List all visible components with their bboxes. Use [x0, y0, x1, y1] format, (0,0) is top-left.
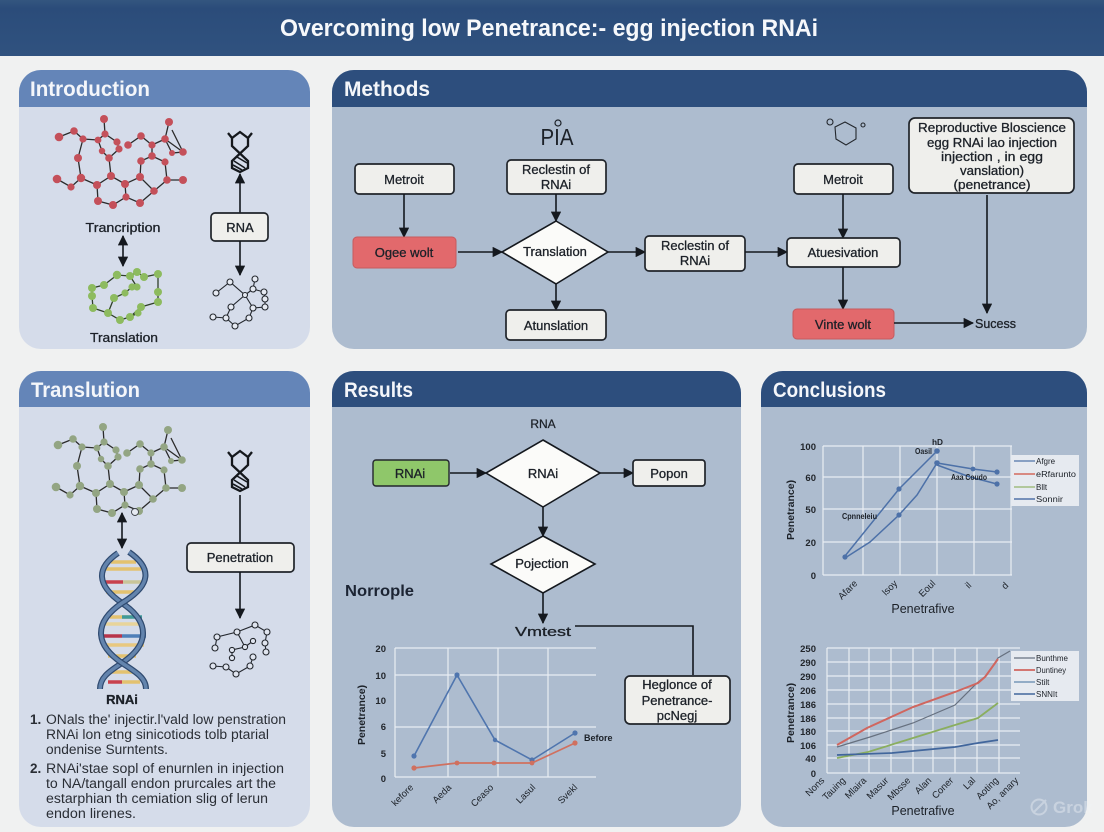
markers [842, 448, 1000, 560]
label: Vmtest: Vmtest [515, 624, 572, 639]
series: blue [411, 672, 578, 763]
x axis labels: Afare [836, 578, 860, 602]
node: Penetration: Penetration [207, 550, 273, 565]
y axis ticks: 20 [805, 538, 816, 549]
x axis labels: Ao, anary [985, 775, 1021, 812]
node: Reclestin of RNAi top [507, 160, 606, 194]
node: Atunslation: Atunslation [524, 318, 588, 333]
arrow: up to hexagon [239, 174, 241, 213]
arrow [842, 267, 844, 309]
watermark: Grok: Grok [1053, 798, 1093, 817]
x axis title: Penetrafive [891, 602, 955, 616]
arrow [450, 472, 486, 474]
panel: translution [19, 371, 310, 827]
x axis labels: lsoy [880, 578, 900, 598]
node: reproductive bioscience box: (penetrance) [954, 177, 1030, 192]
icon: hexagon glyph [228, 132, 252, 172]
connector [239, 495, 241, 543]
data annotations [842, 438, 987, 521]
y axis label: Penetrance) [785, 683, 797, 743]
arrow [555, 284, 557, 310]
arrow [542, 507, 544, 536]
heading: conclusions: Conclusions [773, 379, 886, 402]
x axis labels: Tauing [821, 775, 848, 803]
node: Metroit left: Metroit [384, 172, 424, 187]
y axis ticks: 20 [375, 644, 386, 655]
x axis labels: Aeda [431, 782, 455, 806]
node: red Ogee wolt [353, 237, 456, 268]
numbered text list: 2. [30, 761, 41, 776]
arrow [608, 251, 645, 253]
x axis labels [804, 775, 1021, 812]
numbered text list: endon lirenes. [46, 806, 136, 821]
icon: outline molecule [210, 622, 270, 677]
y axis label: Penetrance) [785, 480, 797, 540]
legend [1011, 455, 1079, 506]
x axis title: Penetrafive [891, 804, 955, 818]
x axis labels [390, 782, 580, 810]
numbered text list: RNAi lon etng sinicotiods tolb ptarial [46, 727, 269, 742]
panel: methods [332, 70, 1087, 349]
node: Reclestin of RNAi middle [645, 236, 745, 271]
series: grey [837, 651, 1010, 747]
y axis ticks: 5 [381, 749, 387, 760]
node: Atuesivation: Atuesivation [808, 245, 878, 260]
line chart: bottom [785, 644, 1079, 818]
node: Atunslation [506, 310, 606, 340]
numbered text list: ondenise Surntents. [46, 742, 168, 757]
node: reproductive bioscience box: egg RNAi lao injection [927, 135, 1057, 150]
x axis labels [836, 578, 1011, 602]
node: Heglonce of Penetrance: pcNegj [657, 708, 697, 723]
x axis labels: Lal [961, 775, 978, 792]
node: Reclestin of RNAi middle: RNAi [680, 253, 710, 268]
arrow [555, 194, 557, 221]
node: Popon [633, 460, 705, 486]
y axis ticks: 290 [800, 658, 816, 669]
arrow: transcription to translation [122, 236, 124, 266]
y axis ticks: 180 [800, 727, 816, 738]
y axis ticks: 10 [375, 671, 386, 682]
label: Norrople: Norrople [345, 583, 414, 600]
y axis ticks: 100 [800, 442, 816, 453]
arrow [600, 472, 633, 474]
node: Reclestin of RNAi top: RNAi [541, 177, 571, 192]
node: Heglonce of Penetrance: Penetrance- [642, 693, 712, 708]
node: Popon: Popon [650, 466, 688, 481]
arrow [458, 251, 502, 253]
icon: DNA helix [100, 552, 146, 689]
icon: small ring [827, 119, 865, 145]
title banner [0, 0, 1104, 56]
y axis ticks: 290 [800, 672, 816, 683]
arrow [403, 194, 405, 237]
decision: RNAi: RNAi [528, 466, 558, 481]
x axis labels: Svekl [556, 782, 580, 807]
legend: Sonnir [1036, 495, 1063, 504]
x axis labels: Coner [930, 775, 956, 801]
y axis ticks: 186 [800, 714, 816, 725]
y axis ticks: 186 [800, 700, 816, 711]
node: Heglonce of Penetrance: Heglonce of [642, 677, 712, 692]
y axis ticks: 0 [381, 774, 386, 785]
legend: Afgre [1036, 457, 1056, 466]
arrow [986, 195, 988, 313]
legend: Bllt [1036, 483, 1048, 492]
series: green [837, 703, 998, 758]
node: green RNAi: RNAi [395, 466, 425, 481]
node: RNA: RNA [226, 220, 254, 235]
panel: introduction [19, 70, 310, 349]
x axis labels: Aoting [974, 775, 1001, 802]
decision: RNAi [486, 440, 600, 507]
node: reproductive bioscience box: Reproductive Bloscience [918, 120, 1066, 135]
node: red Vinte wolt: Vinte wolt [815, 317, 871, 332]
icon: outline molecule [210, 276, 268, 329]
icon: hexagon glyph [228, 451, 252, 491]
decision: Translation: Translation [523, 244, 587, 259]
series label: Before: Before [584, 733, 613, 743]
numbered text list: 1. [30, 712, 41, 727]
x axis labels: kefore [390, 782, 416, 809]
arrow: down to molecule [239, 241, 241, 275]
label: transcription: Trancription [86, 220, 160, 235]
heading: translution: Translution [31, 379, 140, 402]
x axis labels: Masur [865, 775, 891, 802]
legend [1011, 651, 1079, 701]
node: Metroit left [355, 164, 454, 194]
y axis ticks: 0 [811, 571, 816, 582]
data annotations: hD [932, 438, 943, 447]
decision: Pojection: Pojection [515, 556, 569, 571]
arrow [894, 322, 973, 324]
y axis ticks [375, 644, 387, 785]
node: red Vinte wolt [793, 309, 894, 339]
y axis ticks: 206 [800, 686, 816, 697]
arrow [842, 194, 844, 238]
y axis ticks [800, 644, 816, 780]
legend: SNNIt [1036, 690, 1058, 699]
icon: olive molecule [52, 423, 186, 517]
legend: eRfarunto [1036, 470, 1077, 479]
decision: Pojection [491, 536, 595, 593]
arrow [239, 572, 241, 618]
icon: PA glyph: PIA [540, 124, 574, 150]
legend: Duntiney [1036, 666, 1066, 675]
numbered text list: estarphian th cemiation slig of lerun [46, 791, 268, 806]
y axis ticks: 6 [381, 722, 386, 733]
node: reproductive bioscience box: vanslation) [960, 163, 1024, 178]
x axis labels: Ceaso [469, 782, 496, 810]
node: Reclestin of RNAi middle: Reclestin of [661, 238, 729, 253]
legend: Bunthme [1036, 654, 1069, 663]
numbered text list: ONals the' injectir.l'vald low penstration [46, 712, 286, 727]
series: red [411, 740, 578, 771]
line chart: penetrance before and after [356, 644, 613, 810]
data annotations: Aaa Coudo [951, 473, 987, 482]
y axis ticks: 106 [800, 741, 816, 752]
node: reproductive bioscience box [909, 118, 1074, 193]
decision: Translation [502, 221, 608, 284]
panel: conclusions [761, 371, 1087, 827]
numbered text list: RNAi'stae sopl of enurnlen in injection [46, 761, 284, 776]
y axis ticks: 60 [805, 473, 816, 484]
legend: Stilt [1036, 678, 1050, 687]
data annotations: Oasil [915, 447, 932, 456]
x axis labels: d [1000, 580, 1011, 592]
data annotations: Cpnneleiu [842, 512, 877, 521]
y axis ticks: 0 [811, 769, 816, 780]
x axis labels: Mbsse [886, 775, 913, 803]
heading: methods: Methods [344, 78, 430, 101]
arrow: molecule to DNA [121, 513, 123, 548]
icon: green molecule [88, 268, 162, 324]
arrow [542, 593, 544, 623]
x axis labels: Nons [804, 775, 827, 799]
panel: results [332, 371, 741, 827]
x axis labels: Eoul [917, 578, 938, 600]
title banner: Overcoming low Penetrance:- egg injection RNAi [280, 15, 818, 42]
node: green RNAi [373, 460, 449, 486]
icon: red molecule [53, 115, 187, 209]
node: Metroit right: Metroit [823, 172, 863, 187]
y axis ticks: 250 [800, 644, 816, 655]
arrow [745, 251, 787, 253]
y axis ticks: 40 [805, 754, 816, 765]
y axis ticks [800, 442, 816, 582]
line chart: top [785, 438, 1079, 616]
heading: results: Results [344, 379, 413, 402]
y axis label: Penetrance) [356, 685, 368, 745]
label: RNA: RNA [530, 417, 556, 431]
node: Reclestin of RNAi top: Reclestin of [522, 162, 590, 177]
series: blue [837, 740, 998, 755]
node: Atuesivation [787, 238, 900, 267]
y axis ticks: 50 [805, 505, 816, 516]
heading: introduction: Introduction [30, 78, 150, 101]
x axis labels: Mlaira [843, 775, 870, 801]
series [845, 451, 997, 558]
label: RNAi: RNAi [106, 692, 138, 707]
node: reproductive bioscience box: injection , in egg [941, 149, 1043, 164]
x axis labels: il [963, 580, 974, 591]
node: Penetration [187, 543, 294, 572]
numbered text list: to NA/tangall endon prurcales art the [46, 776, 276, 791]
node: Heglonce of Penetrance [625, 676, 730, 724]
x axis labels: Alan [913, 775, 934, 797]
x axis labels: Lasul [514, 782, 538, 806]
connector [575, 626, 693, 675]
y axis ticks: 10 [375, 696, 386, 707]
numbered text list [30, 712, 286, 821]
watermark: Grok [1032, 798, 1093, 817]
series: red [837, 659, 998, 745]
label: success: Sucess [975, 316, 1016, 331]
node: Metroit right [794, 164, 893, 194]
node: RNA [211, 213, 268, 241]
node: red Ogee wolt: Ogee wolt [375, 245, 434, 260]
label: translation: Translation [90, 330, 158, 345]
